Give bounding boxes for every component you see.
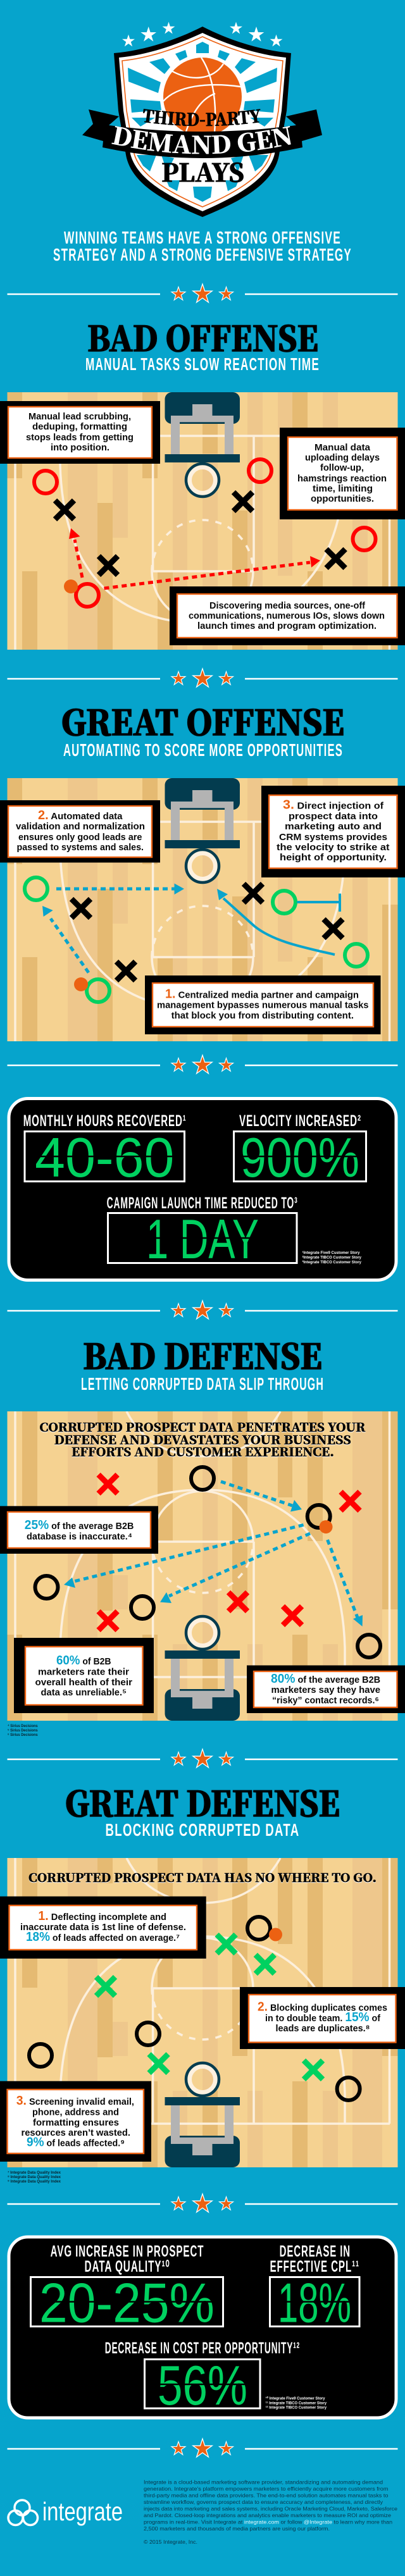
callout: manual data uploading: uploading delays xyxy=(305,452,380,463)
defense players: black x marks xyxy=(55,492,346,575)
about text block: injects data into marketing and sales systems, including Oracle Marketing Cloud, Marketo, Salesforce xyxy=(144,2505,397,2511)
callout 1: deflecting incomplete data: inaccurate data is 1st line of defense. xyxy=(20,1922,186,1933)
callout 2: blocking duplicates: 2. Blocking duplicates comes xyxy=(258,2000,387,2014)
divider stars xyxy=(8,1301,397,1319)
callout 1: deflecting incomplete data: 18% of leads affected on average.⁷ xyxy=(26,1930,180,1944)
callout: 80 percent: “risky” contact records.⁶ xyxy=(272,1695,379,1706)
callout: discovering media sources xyxy=(170,586,405,645)
callout 3: direct injection: 3. Direct injection of xyxy=(283,798,384,812)
divider stars xyxy=(8,1055,397,1074)
callout 3: direct injection: prospect data into xyxy=(289,811,378,822)
callout 3: screening invalid email xyxy=(0,2081,151,2162)
footnotes: bad defense sources: ⁶ Sirius Decisions xyxy=(8,1733,38,1737)
callout 3: screening invalid email: phone, address and xyxy=(32,2107,119,2118)
ball xyxy=(269,1928,282,1941)
callout: discovering media sources: Discovering media sources, one-off xyxy=(209,600,366,611)
callout 2: automated data validation: ensures only good leads are xyxy=(18,832,142,843)
callout: manual lead scrubbing: deduping, formatting xyxy=(32,421,127,432)
logo text: plays: PLAYS xyxy=(161,154,244,189)
callout 3: screening invalid email: 9% of leads affected.⁹ xyxy=(27,2136,125,2150)
ball xyxy=(74,977,88,991)
stat: avg increase in prospect data quality: 20-25% xyxy=(39,2271,215,2334)
stat: decrease in effective cpl xyxy=(270,2243,359,2334)
callout: 60 percent: marketers rate their xyxy=(38,1666,129,1677)
callout: manual data uploading: opportunities. xyxy=(311,493,374,504)
divider stars xyxy=(8,1749,397,1768)
about text block: third-party media and offline data providers. The end-to-end solution automates manual tasks to xyxy=(144,2492,389,2499)
ribbon banner xyxy=(82,109,322,158)
panel: bad defense court play diagram xyxy=(0,1404,405,1721)
court floor xyxy=(8,1411,397,1721)
callout 3: screening invalid email: resources aren’t wasted. xyxy=(22,2127,130,2138)
red dashed arrows xyxy=(69,528,320,588)
callout: 80 percent: 80% of the average B2B xyxy=(271,1672,380,1686)
callout: 60 percent: data as unreliable.⁵ xyxy=(40,1687,127,1698)
defense players: red x marks xyxy=(99,1475,359,1630)
about text block: and Pardot. Closed-loop integrations and analytics enable marketers to measure ROI and optimize xyxy=(144,2512,391,2518)
callout 3: direct injection xyxy=(261,786,405,877)
stat: campaign launch time: 1 DAY xyxy=(146,1208,259,1270)
callout: manual lead scrubbing: stops leads from getting xyxy=(26,432,134,443)
footnotes: bad defense sources xyxy=(8,1724,38,1737)
footnotes: great defense sources xyxy=(8,2170,61,2184)
logo stars xyxy=(122,22,282,46)
callout 1: deflecting incomplete data: 1. Deflecting incomplete and xyxy=(38,1909,166,1923)
callout: manual data uploading xyxy=(280,428,405,519)
footnotes: ¹¹ Integrate TIBCO Customer Story xyxy=(266,2401,327,2405)
callout: manual lead scrubbing xyxy=(0,401,160,464)
logo: integrate xyxy=(8,2497,123,2526)
stat: velocity increased: 900% xyxy=(240,1126,359,1189)
callout: 25 percent: 25% of the average B2B xyxy=(25,1518,134,1532)
footnotes xyxy=(266,2396,327,2410)
callout 3: screening invalid email: 3. Screening invalid email, xyxy=(16,2094,134,2108)
footnotes: ³Integrate TIBCO Customer Story xyxy=(302,1260,361,1265)
callout: 60 percent xyxy=(14,1638,154,1713)
stat: decrease in cost per opportunity: 56% xyxy=(158,2354,247,2417)
stat: avg increase in prospect data quality: AVG INCREASE IN PROSPECT xyxy=(51,2243,204,2260)
callout 1: centralized media partner: that block you from distributing content. xyxy=(171,1010,354,1021)
callout 3: screening invalid email: formatting ensures xyxy=(33,2117,119,2128)
about text block: generation. Integrate’s platform empowers marketers to efficiently acquire more customers from xyxy=(144,2486,389,2492)
section heading: great offense: GREAT OFFENSE xyxy=(61,697,344,745)
footnotes: ¹⁰ Integrate Five9 Customer Story xyxy=(266,2396,325,2401)
court floor xyxy=(8,392,397,650)
ball xyxy=(319,1520,333,1533)
ball xyxy=(64,579,78,593)
stat: monthly hours recovered: 40-60 xyxy=(35,1126,175,1189)
about text block: streamline workflow, governs prospect data to ensure accuracy and completeness, and directly xyxy=(144,2499,383,2505)
wordmark: integrate xyxy=(42,2497,123,2526)
callout 1: centralized media partner: management bypasses numerous manual tasks xyxy=(157,1000,368,1011)
court headline: EFFORTS AND CUSTOMER EXPERIENCE. xyxy=(72,1443,334,1460)
footnotes: bad defense sources: ⁵ Sirius Decisions xyxy=(8,1728,38,1733)
court floor xyxy=(8,1858,397,2167)
divider stars xyxy=(8,284,397,302)
callout: manual data uploading: follow-up, xyxy=(320,462,364,473)
callout: 80 percent xyxy=(247,1665,405,1713)
stat: decrease in effective cpl: DECREASE IN xyxy=(280,2243,351,2260)
panel: great defense court play diagram xyxy=(0,1851,405,2167)
stat: campaign launch time xyxy=(107,1194,298,1270)
section heading: great defense: GREAT DEFENSE xyxy=(65,1778,340,1826)
stat: monthly hours recovered: MONTHLY HOURS RECOVERED¹ xyxy=(23,1112,187,1130)
callout 1: centralized media partner: 1. Centralized media partner and campaign xyxy=(165,987,359,1001)
divider stars xyxy=(8,669,397,687)
callout: 25 percent xyxy=(0,1506,158,1554)
footnotes: great defense sources: ⁸ Integrate Data Quality Index xyxy=(8,2175,61,2179)
callout: manual lead scrubbing: Manual lead scrubbing, xyxy=(28,411,131,422)
scoreboard frame xyxy=(9,1098,396,1280)
offense players: red circles xyxy=(34,459,376,607)
callout: discovering media sources: communications, numerous IOs, slows down xyxy=(189,610,385,621)
about text block: 2,500 marketers and thousands of media partners are using our platform. xyxy=(144,2525,330,2532)
panel: defense results scoreboard xyxy=(9,2237,396,2418)
callout 1: centralized media partner xyxy=(145,975,381,1034)
footnotes: bad defense sources: ⁴ Sirius Decisions xyxy=(8,1724,38,1728)
footnotes xyxy=(302,1251,361,1265)
court floor xyxy=(8,778,397,1041)
footnotes: great defense sources: ⁷ Integrate Data Quality Index xyxy=(8,2170,61,2175)
section heading: bad defense: BAD DEFENSE xyxy=(83,1330,322,1379)
defense players: black x marks xyxy=(72,884,343,981)
callout: manual data uploading: Manual data xyxy=(315,442,371,453)
panel: great offense court play diagram xyxy=(0,778,405,1094)
icon: interlocked rings xyxy=(8,2500,38,2525)
icon: basketball xyxy=(163,58,242,136)
callout 2: blocking duplicates: leads are duplicates.⁸ xyxy=(276,2023,370,2034)
section heading: bad offense: BAD OFFENSE xyxy=(87,313,318,361)
stat: avg increase in prospect data quality xyxy=(30,2243,223,2334)
divider stars xyxy=(8,2439,397,2457)
tagline xyxy=(53,228,352,264)
callout 2: automated data validation: 2. Automated data xyxy=(38,808,123,822)
callout 3: direct injection: height of opportunity. xyxy=(280,852,387,863)
callout 2: automated data validation: validation and normalization xyxy=(16,821,145,832)
footnotes: ¹Integrate Five9 Customer Story xyxy=(302,1251,360,1255)
divider stars xyxy=(8,2194,397,2212)
court headline: DEFENSE AND DEVASTATES YOUR BUSINESS xyxy=(54,1431,351,1448)
callout 3: direct injection: the velocity to strike at xyxy=(277,842,390,853)
offense players: black circles xyxy=(35,1467,380,1657)
callout 2: automated data validation xyxy=(0,800,160,863)
footnotes: great defense sources: ⁹ Integrate Data Quality Index xyxy=(8,2179,61,2184)
callout 2: blocking duplicates: in to double team. 15% of xyxy=(265,2010,381,2024)
stat: decrease in cost per opportunity xyxy=(105,2339,300,2417)
scoreboard frame xyxy=(9,2237,396,2418)
panel: offense results scoreboard xyxy=(9,1098,396,1280)
footnotes: ¹² Integrate TIBCO Customer Story xyxy=(266,2405,327,2410)
about text block: © 2015 Integrate, Inc. xyxy=(144,2539,197,2545)
stat: decrease in effective cpl: 18% xyxy=(278,2271,351,2334)
blue dashed arrows xyxy=(64,1482,363,1626)
about text block: programs in real-time. Visit Integrate at integrate.com or follow @Integrate to learn why more than xyxy=(144,2519,392,2525)
stat: avg increase in prospect data quality: DATA QUALITY¹⁰ xyxy=(85,2258,170,2276)
callout 2: automated data validation: passed to systems and sales. xyxy=(16,842,144,853)
callout 2: blocking duplicates xyxy=(240,1987,405,2049)
callout: 25 percent: database is inaccurate.⁴ xyxy=(27,1531,132,1542)
callout: manual data uploading: time, limiting xyxy=(313,483,373,494)
offense players: black circles xyxy=(29,1917,360,2100)
callout 3: direct injection: CRM systems provides xyxy=(279,832,387,843)
callout: 80 percent: marketers say they have xyxy=(271,1685,380,1695)
callout: discovering media sources: launch times and program optimization. xyxy=(197,621,377,631)
logo text: demand gen: DEMAND GEN xyxy=(111,126,291,154)
logo badge: third-party demand gen plays xyxy=(82,22,322,217)
panel: bad offense court play diagram xyxy=(0,392,405,709)
logo text: third-party: THIRD-PARTY xyxy=(143,109,261,127)
callout 1: deflecting incomplete data xyxy=(0,1897,206,1959)
callout: 60 percent: overall health of their xyxy=(35,1677,132,1688)
offense players: green circles xyxy=(25,877,368,1002)
callout: manual lead scrubbing: into position. xyxy=(51,442,109,453)
court headline xyxy=(39,1418,366,1460)
about text block xyxy=(144,2479,397,2545)
blue play arrows xyxy=(42,883,340,973)
defense players: green x marks xyxy=(96,1935,323,2079)
court headline: CORRUPTED PROSPECT DATA HAS NO WHERE TO GO. xyxy=(28,1869,377,1886)
section heading: great defense: BLOCKING CORRUPTED DATA xyxy=(105,1820,300,1840)
about text block: Integrate is a cloud-based marketing software provider, standardizing and automating demand xyxy=(144,2479,383,2486)
callout: manual data uploading: hamstrings reaction xyxy=(297,473,387,484)
callout: 60 percent: 60% of B2B xyxy=(56,1654,111,1668)
court headline: CORRUPTED PROSPECT DATA PENETRATES YOUR xyxy=(39,1418,366,1435)
footnotes: ²Integrate TIBCO Customer Story xyxy=(302,1255,361,1260)
callout 3: direct injection: marketing auto and xyxy=(285,821,382,832)
shield xyxy=(114,27,291,217)
